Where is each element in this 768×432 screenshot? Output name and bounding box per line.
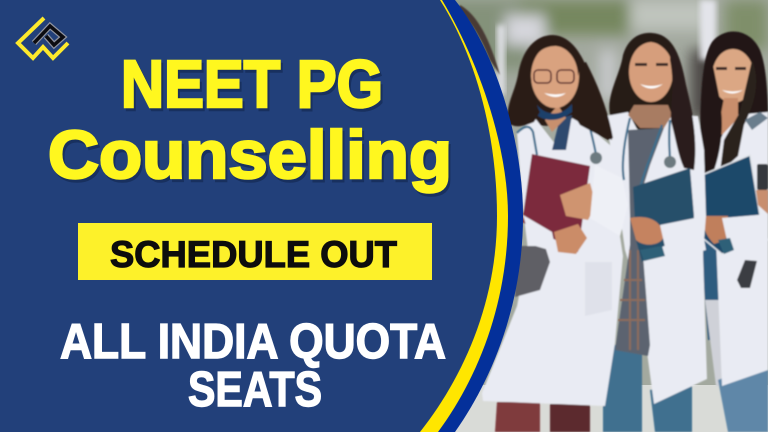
curved band: yellow stripe (0, 0, 508, 432)
hair strands falling over the coat (694, 60, 722, 176)
hair strands falling over the coat (670, 45, 695, 170)
photo: three medical students in white coats (482, 32, 768, 432)
student: right (690, 32, 768, 432)
photo: blurred campus background (440, 0, 768, 432)
title: Counselling: Counselling (50, 120, 454, 196)
student: centre (603, 33, 707, 432)
banner: schedule out (78, 223, 432, 280)
subheading: all india quota seats: ALL INDIA QUOTA (60, 315, 446, 369)
banner: schedule out: SCHEDULE OUT (110, 234, 397, 275)
title: NEET PG: NEET PG (123, 50, 385, 125)
hair strands falling over the coat (509, 65, 540, 126)
subheading: all india quota seats: SEATS (188, 363, 322, 417)
logo: yellow chevron and black P mark (18, 18, 68, 58)
title: NEET PG: NEET PG (121, 47, 383, 122)
curved band: royal blue edge (0, 0, 523, 432)
panel: navy background (0, 0, 497, 432)
title: Counselling: Counselling (48, 117, 452, 193)
student: left (482, 35, 628, 432)
subheading: all india quota seats (60, 315, 446, 417)
